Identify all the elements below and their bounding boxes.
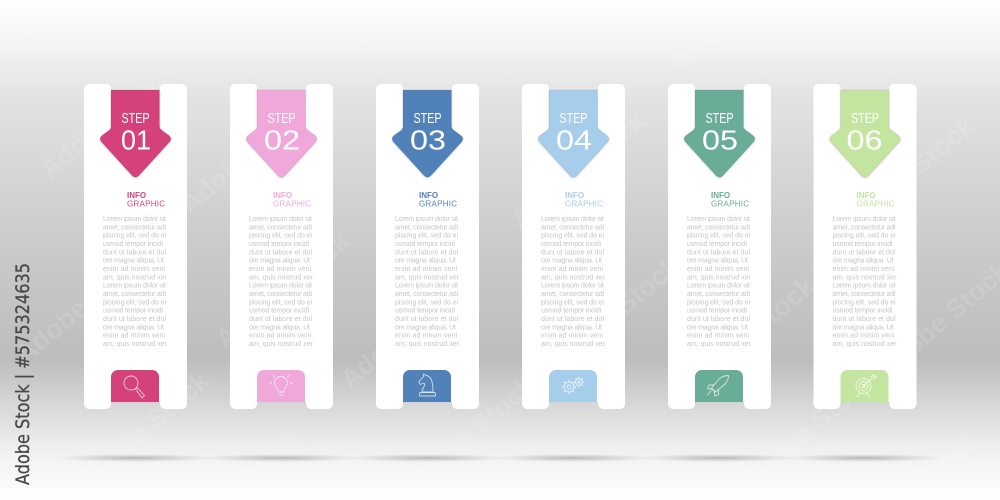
text block: step 03: usmod tempor incidi (395, 241, 455, 248)
watermark: Adobe Stock (735, 365, 881, 495)
text block: step 05: usmod tempor incidi (687, 241, 747, 248)
text block: step 01: enim ad minim veni (103, 333, 165, 340)
tab: step 04 (549, 370, 597, 402)
heading: step 02 (273, 191, 311, 208)
text block: step 01: piscing elit, sed do ei (103, 233, 166, 240)
text block: step 04: dunt ut labore et dol (541, 316, 604, 323)
text block: step 03: am, quis nostrud xer (395, 341, 460, 348)
text block: step 06: am, quis nostrud xer (832, 274, 897, 281)
text block: step 05: usmod tempor incidi (687, 308, 747, 315)
heading: step 01: INFO (127, 191, 146, 200)
watermark: Adobe Stock (540, 250, 686, 380)
text block: step 04: usmod tempor incidi (541, 241, 601, 248)
text block: step 02: piscing elit, sed do ei (249, 299, 312, 306)
text block: step 03: dunt ut labore et dol (395, 316, 458, 323)
text block: step 06: am, quis nostrud xer (832, 341, 897, 348)
text block: step 04: am, quis nostrud xer (541, 274, 606, 281)
arrow: step 01 (100, 90, 171, 178)
arrow: step 06: 06 (846, 124, 882, 156)
text block: step 04: ore magna aliqua. Ut (541, 324, 602, 331)
arrow: step 03: STEP (414, 111, 442, 127)
text block: step 06: dunt ut labore et dol (832, 249, 896, 256)
text block: step 06: piscing elit, sed do ei (832, 299, 896, 306)
text block: step 01: amet, consectetur adi (103, 291, 166, 298)
panel: step 01 (84, 84, 187, 409)
text block: step 05: Lorem ipsum dolor sit (687, 216, 750, 223)
text block: step 06: piscing elit, sed do ei (832, 233, 896, 240)
text block: step 04: piscing elit, sed do ei (541, 299, 604, 306)
text block: step 04: piscing elit, sed do ei (541, 233, 604, 240)
heading: step 05: GRAPHIC (711, 200, 749, 208)
icon: target (856, 374, 876, 397)
text block: step 02: am, quis nostrud xer (249, 274, 314, 281)
text block: step 06: enim ad minim veni (832, 333, 895, 340)
arrow: step 04 (538, 90, 609, 178)
text block: step 03: enim ad minim veni (395, 266, 457, 273)
text block: step 05: am, quis nostrud xer (687, 341, 752, 348)
text block: step 05: dunt ut labore et dol (687, 249, 750, 256)
text block: step 03: usmod tempor incidi (395, 308, 455, 315)
icon: rocket (708, 376, 728, 396)
watermark: Adobe Stock (395, 370, 541, 500)
text block: step 01: ore magna aliqua. Ut (103, 258, 164, 265)
heading: step 03: GRAPHIC (419, 200, 457, 208)
text block: step 02: piscing elit, sed do ei (249, 233, 312, 240)
text block: step 01: dunt ut labore et dol (103, 316, 166, 323)
arrow: step 02: STEP (268, 111, 296, 127)
text block: step 02: dunt ut labore et dol (249, 316, 312, 323)
heading: step 04: INFO (565, 191, 584, 200)
text block: step 05 (687, 216, 752, 348)
heading: step 01: GRAPHIC (127, 200, 165, 208)
arrow: step 03: 03 (410, 124, 446, 156)
text block: step 01: piscing elit, sed do ei (103, 299, 166, 306)
text block: step 04: dunt ut labore et dol (541, 249, 604, 256)
text block: step 01: Lorem ipsum dolor sit (103, 283, 166, 290)
text block: step 04: amet, consectetur adi (541, 224, 604, 231)
tab: step 03 (403, 370, 451, 402)
text block: step 02: ore magna aliqua. Ut (249, 324, 310, 331)
text block: step 02: ore magna aliqua. Ut (249, 258, 310, 265)
panel: step 04 (522, 84, 625, 409)
tab: step 06 (840, 370, 888, 402)
text block: step 06: amet, consectetur adi (832, 224, 896, 231)
text block: step 05: ore magna aliqua. Ut (687, 258, 748, 265)
text block: step 03: Lorem ipsum dolor sit (395, 216, 458, 223)
text block: step 06: enim ad minim veni (832, 266, 895, 273)
watermark: Adobe Stock (35, 55, 181, 185)
text block: step 02: am, quis nostrud xer (249, 341, 314, 348)
text block: step 04: enim ad minim veni (541, 333, 603, 340)
arrow: step 06: STEP (851, 111, 879, 127)
text block: step 03: piscing elit, sed do ei (395, 233, 458, 240)
arrow: step 01: STEP (122, 111, 150, 127)
text block: step 06: Lorem ipsum dolor sit (832, 283, 896, 290)
text block: step 05: amet, consectetur adi (687, 224, 750, 231)
text block: step 02: Lorem ipsum dolor sit (249, 216, 312, 223)
heading: step 02: GRAPHIC (273, 200, 311, 208)
text block: step 05: Lorem ipsum dolor sit (687, 283, 750, 290)
text block: step 02: dunt ut labore et dol (249, 249, 312, 256)
text block: step 06: ore magna aliqua. Ut (832, 324, 894, 331)
floor shadows (55, 454, 944, 462)
text block: step 05: amet, consectetur adi (687, 291, 750, 298)
watermark: Stock (910, 424, 986, 495)
text block: step 01: dunt ut labore et dol (103, 249, 166, 256)
text block: step 03: amet, consectetur adi (395, 224, 458, 231)
heading: step 04 (565, 191, 603, 208)
text block: step 04: am, quis nostrud xer (541, 341, 606, 348)
text block: step 01 (103, 216, 168, 348)
arrow: step 05: STEP (706, 111, 734, 127)
text block: step 02: Lorem ipsum dolor sit (249, 283, 312, 290)
watermark: Adobe Stock (70, 365, 216, 495)
arrow: step 01: 01 (121, 124, 151, 156)
text block: step 04: ore magna aliqua. Ut (541, 258, 602, 265)
icon: light bulb (270, 376, 292, 395)
text block: step 03: ore magna aliqua. Ut (395, 324, 456, 331)
text block: step 04 (541, 216, 606, 348)
text block: step 05: piscing elit, sed do ei (687, 299, 750, 306)
panel: step 05 (668, 84, 771, 409)
text block: step 03: Lorem ipsum dolor sit (395, 283, 458, 290)
text block: step 02: amet, consectetur adi (249, 224, 312, 231)
watermark: Adobe Stock (505, 105, 651, 235)
arrow: step 02: 02 (264, 124, 300, 156)
arrow: step 04: STEP (560, 111, 588, 127)
arrow: step 05: 05 (702, 124, 738, 156)
text block: step 04: amet, consectetur adi (541, 291, 604, 298)
heading: step 03 (419, 191, 457, 208)
arrow: step 02 (246, 90, 317, 178)
text block: step 03: dunt ut labore et dol (395, 249, 458, 256)
text block: step 01: amet, consectetur adi (103, 224, 166, 231)
text block: step 06 (832, 216, 897, 348)
tab: step 02 (257, 370, 305, 402)
watermark: Adobe Stock (335, 265, 481, 395)
text block: step 03: ore magna aliqua. Ut (395, 258, 456, 265)
text block: step 05: piscing elit, sed do ei (687, 233, 750, 240)
text block: step 06: usmod tempor incidi (832, 241, 893, 248)
watermark: Adobe Stock (10, 240, 156, 370)
text block: step 06: ore magna aliqua. Ut (832, 258, 894, 265)
text block: step 01: ore magna aliqua. Ut (103, 324, 164, 331)
heading: step 06: GRAPHIC (856, 200, 895, 208)
text block: step 06: dunt ut labore et dol (832, 316, 896, 323)
arrow: step 03 (392, 90, 463, 178)
text block: step 02: enim ad minim veni (249, 333, 311, 340)
heading: step 06 (856, 191, 895, 208)
heading: step 01 (127, 191, 165, 208)
text block: step 05: enim ad minim veni (687, 333, 749, 340)
text block: step 02: enim ad minim veni (249, 266, 311, 273)
tab: step 05 (695, 370, 743, 402)
heading: step 04: GRAPHIC (565, 200, 603, 208)
watermark: Stock (235, 424, 311, 495)
text block: step 01: am, quis nostrud xer (103, 341, 168, 348)
panel: step 06 (814, 84, 916, 409)
text block: step 02: amet, consectetur adi (249, 291, 312, 298)
text block: step 05: enim ad minim veni (687, 266, 749, 273)
text block: step 04: usmod tempor incidi (541, 308, 601, 315)
text block: step 03: amet, consectetur adi (395, 291, 458, 298)
text block: step 05: ore magna aliqua. Ut (687, 324, 748, 331)
arrow: step 05 (684, 90, 755, 178)
watermark: Adobe Stock (835, 110, 981, 240)
panel: step 02 (230, 84, 333, 409)
watermark: Adobe Stock (675, 270, 821, 400)
text block: step 01: enim ad minim veni (103, 266, 165, 273)
panel: step 03 (376, 84, 479, 409)
text block: step 04: Lorem ipsum dolor sit (541, 216, 604, 223)
text block: step 04: enim ad minim veni (541, 266, 603, 273)
heading: step 05: INFO (711, 191, 730, 200)
arrow: step 06 (830, 90, 900, 178)
text block: step 03 (395, 216, 460, 348)
icon: chess knight (419, 374, 436, 396)
heading: step 03: INFO (419, 191, 438, 200)
vertical stock id text: Adobe Stock | #575324635 (12, 263, 34, 485)
text block: step 01: usmod tempor incidi (103, 241, 163, 248)
icon: magnifying glass (124, 376, 144, 398)
tab: step 01 (111, 370, 159, 402)
text block: step 03: piscing elit, sed do ei (395, 299, 458, 306)
text block: step 06: Lorem ipsum dolor sit (832, 216, 896, 223)
text block: step 06: amet, consectetur adi (832, 291, 896, 298)
heading: step 02: INFO (273, 191, 292, 200)
watermark: Adobe Stock (175, 90, 321, 220)
text block: step 06: usmod tempor incidi (832, 308, 893, 315)
text block: step 01: usmod tempor incidi (103, 308, 163, 315)
text block: step 04: Lorem ipsum dolor sit (541, 283, 604, 290)
watermark: Adobe Stock (210, 225, 356, 355)
heading: step 05 (711, 191, 749, 208)
text block: step 02 (249, 216, 314, 348)
text block: step 01: Lorem ipsum dolor sit (103, 216, 166, 223)
icon: gears (562, 377, 584, 394)
text block: step 02: usmod tempor incidi (249, 241, 309, 248)
heading: step 06: INFO (856, 191, 876, 200)
text block: step 03: enim ad minim veni (395, 333, 457, 340)
text block: step 05: am, quis nostrud xer (687, 274, 752, 281)
text block: step 05: dunt ut labore et dol (687, 316, 750, 323)
text block: step 01: am, quis nostrud xer (103, 274, 168, 281)
text block: step 03: am, quis nostrud xer (395, 274, 460, 281)
text block: step 02: usmod tempor incidi (249, 308, 309, 315)
arrow: step 04: 04 (556, 124, 592, 156)
